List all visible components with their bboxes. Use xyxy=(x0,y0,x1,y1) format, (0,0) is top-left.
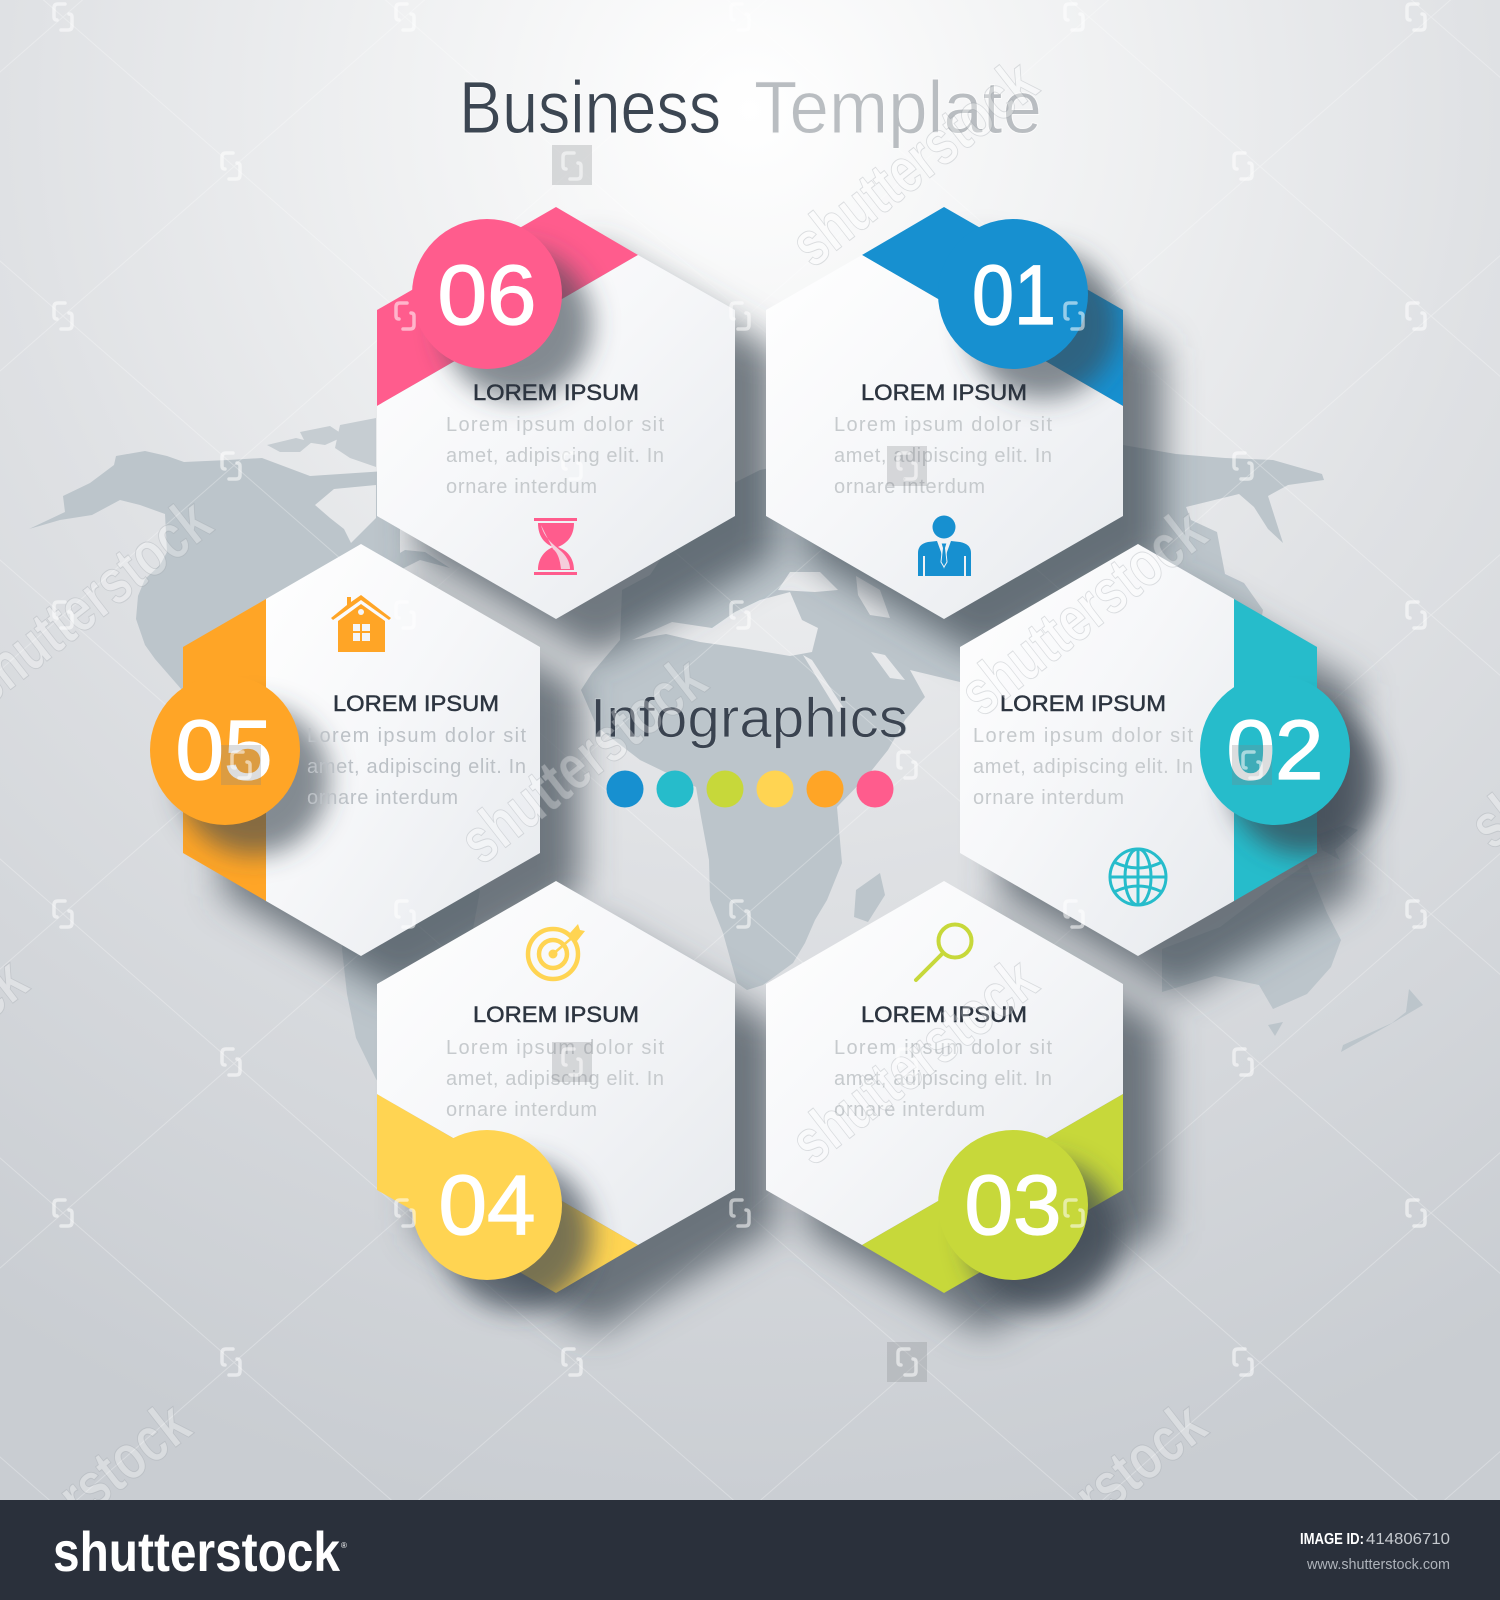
panel: 02: 02 xyxy=(1226,703,1324,797)
panel: 01 xyxy=(766,207,1123,619)
body text 02 xyxy=(973,725,1193,809)
body text 05: amet, adipiscing elit. In xyxy=(307,756,526,778)
icon: target xyxy=(528,924,585,979)
map: new zealand xyxy=(1341,989,1423,1052)
body text 05: ornare interdum xyxy=(307,787,458,809)
body text 04: Lorem ipsum dolor sit xyxy=(446,1037,664,1059)
number badge 06 xyxy=(412,219,562,369)
body text 02: Lorem ipsum dolor sit xyxy=(973,725,1193,747)
footer logo: shutterstock xyxy=(53,1520,341,1583)
body text 04: ornare interdum xyxy=(446,1099,597,1121)
heading 05: LOREM IPSUM xyxy=(333,691,499,716)
body text 01: amet, adipiscing elit. In xyxy=(834,445,1052,467)
map: eurasia and africa xyxy=(581,440,1324,990)
icon: person xyxy=(918,516,971,576)
footer image number: 414806710 xyxy=(1366,1531,1450,1548)
footer registered mark: ® xyxy=(341,1541,347,1550)
number badge 02 xyxy=(1200,675,1350,825)
panel: 06: 06 xyxy=(438,248,536,342)
body text 03 xyxy=(834,1037,1052,1121)
footer image id: IMAGE ID: xyxy=(1300,1531,1364,1548)
body text 06 xyxy=(446,414,664,498)
title: Business xyxy=(459,66,721,149)
heading 03: LOREM IPSUM xyxy=(861,1002,1027,1027)
body text 03: ornare interdum xyxy=(834,1099,985,1121)
icon: globe xyxy=(1110,849,1166,905)
body text 01: ornare interdum xyxy=(834,476,985,498)
heading 04: LOREM IPSUM xyxy=(473,1002,639,1027)
heading 02: LOREM IPSUM xyxy=(1000,691,1166,716)
number badge 01 xyxy=(938,219,1088,369)
body text 02: amet, adipiscing elit. In xyxy=(973,756,1193,778)
heading 06: LOREM IPSUM xyxy=(473,380,639,405)
panel: 05 xyxy=(150,544,540,956)
body text 06: ornare interdum xyxy=(446,476,597,498)
body text 02: ornare interdum xyxy=(973,787,1124,809)
panel: 02 xyxy=(960,544,1380,956)
body text 01: Lorem ipsum dolor sit xyxy=(834,414,1052,436)
panel: 04: 04 xyxy=(438,1158,536,1252)
title: Template xyxy=(754,66,1042,149)
body text 03: Lorem ipsum dolor sit xyxy=(834,1037,1052,1059)
body text 06: Lorem ipsum dolor sit xyxy=(446,414,664,436)
world map xyxy=(29,418,1423,1140)
colour dots xyxy=(606,770,894,808)
panel: 05: 05 xyxy=(176,703,272,797)
panel: 04 xyxy=(377,881,735,1310)
stock watermarks: shutterstock xyxy=(946,494,1219,729)
map: south america xyxy=(342,830,480,1140)
panel: 03: 03 xyxy=(964,1158,1062,1252)
map: madagascar xyxy=(854,873,885,922)
panel: 01: 01 xyxy=(972,248,1056,342)
map: north america xyxy=(29,451,400,720)
body text 05: Lorem ipsum dolor sit xyxy=(307,725,526,747)
watermark squares xyxy=(221,145,1272,1382)
heading 01: LOREM IPSUM xyxy=(861,380,1027,405)
body text 04 xyxy=(446,1037,664,1121)
stock watermarks: shutterstock xyxy=(446,642,719,877)
stock watermarks: shutterstock xyxy=(777,943,1050,1178)
map: tasmania xyxy=(1268,1022,1283,1036)
number badge 03 xyxy=(938,1130,1088,1280)
body text 04: amet, adipiscing elit. In xyxy=(446,1068,664,1090)
body text 05 xyxy=(307,725,526,809)
map: indonesia xyxy=(1317,825,1358,860)
body text 01 xyxy=(834,414,1052,498)
title xyxy=(459,66,1042,149)
map: arctic islands xyxy=(267,418,376,467)
hexagon shadows xyxy=(223,247,1357,1333)
map: caribbean xyxy=(388,550,450,570)
map: australia xyxy=(1162,864,1341,1009)
panel: 06 xyxy=(377,207,735,619)
icon: hourglass xyxy=(534,518,577,575)
icon: house xyxy=(331,595,391,652)
icon: magnifier xyxy=(916,924,972,980)
panel: 03 xyxy=(766,881,1123,1310)
footer bar xyxy=(0,1500,1500,1600)
number badge 05 xyxy=(150,675,300,825)
body text 03: amet, adipiscing elit. In xyxy=(834,1068,1052,1090)
number badge 04 xyxy=(412,1130,562,1280)
footer url: www.shutterstock.com xyxy=(1306,1556,1450,1573)
centre heading: Infographics: Infographics xyxy=(590,686,908,749)
body text 06: amet, adipiscing elit. In xyxy=(446,445,664,467)
